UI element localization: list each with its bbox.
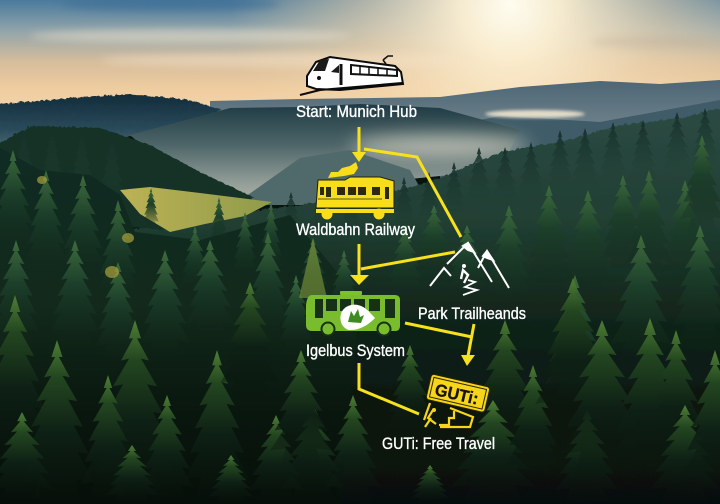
- label: Park Trailheands: Park Trailheands: [418, 305, 526, 323]
- arrow: Munich Hub to Waldbahn Railway: [352, 127, 366, 162]
- arrow: Igelbus System to GUTi icon: [359, 363, 419, 414]
- background: autumn foliage: [37, 176, 327, 298]
- icon: white commuter train: [300, 56, 403, 95]
- label: Waldbahn Railway: Waldbahn Railway: [296, 221, 416, 239]
- connector arrows: [350, 127, 475, 414]
- label: Igelbus System: Igelbus System: [306, 342, 405, 360]
- background: misty mountains: [0, 80, 720, 205]
- background: sunset sky: [0, 0, 720, 112]
- icon: GUTi ticket: [424, 374, 490, 427]
- arrow: Waldbahn Railway to Igelbus System: [350, 244, 369, 285]
- icon: traveller and stairs: [424, 403, 473, 427]
- meadow: [120, 187, 272, 232]
- label: GUTi: Free Travel: GUTi: Free Travel: [382, 435, 495, 453]
- arrow: Park Trailheads to Igelbus route: [361, 252, 455, 269]
- background: mid conifers: [0, 135, 720, 405]
- arrow: Park Trailheads back to Waldbahn Railway: [364, 149, 461, 237]
- background: left foreground slope: [0, 145, 360, 504]
- label: Start: Munich Hub: Start: Munich Hub: [296, 103, 417, 121]
- icon: hedgehog: [340, 305, 375, 330]
- background: forest slopes: [0, 105, 720, 504]
- icon: green Igelbus with hedgehog: [306, 291, 400, 336]
- ticket word: GUTi:: [433, 380, 480, 409]
- background: distant conifers: [12, 108, 720, 252]
- arrow: Igelbus System to GUTi: [405, 323, 475, 366]
- icon: yellow steam train: [316, 162, 394, 220]
- background: near conifers: [0, 278, 720, 504]
- icon: mountains with hiker: [430, 243, 509, 295]
